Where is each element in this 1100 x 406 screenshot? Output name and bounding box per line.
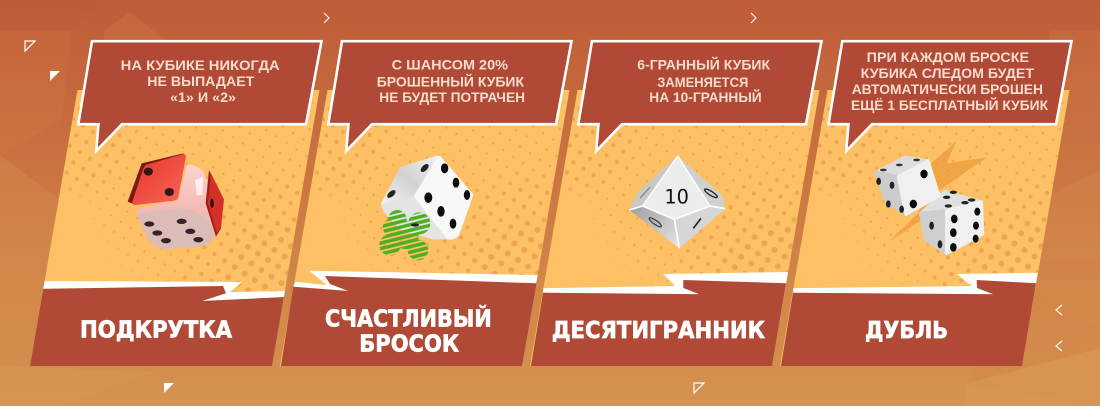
title 1: ПОДКРУТКА	[80, 318, 232, 344]
speech bubble 4: ПРИ КАЖДОМ БРОСКЕ	[867, 49, 1029, 65]
title 4: ДУБЛЬ	[865, 318, 948, 344]
speech bubble 2: БРОШЕННЫЙ КУБИК	[377, 72, 524, 90]
icon: red die	[128, 153, 224, 249]
bottom band 1	[20, 281, 290, 366]
speech bubble 1: «1» И «2»	[170, 89, 236, 105]
speech bubble 3: 6-ГРАННЫЙ КУБИК	[637, 56, 770, 72]
speech bubble 2: НЕ БУДЕТ ПОТРАЧЕН	[379, 89, 525, 105]
speech bubble 3	[578, 41, 822, 151]
title 2: БРОСОК	[359, 332, 459, 358]
speech bubble 1: НА КУБИКЕ НИКОГДА	[121, 57, 280, 73]
speech bubble 1: НЕ ВЫПАДАЕТ	[147, 73, 255, 89]
panel: Дубль	[750, 41, 1100, 370]
speech bubble 3: НА 10-ГРАННЫЙ	[649, 88, 762, 105]
speech bubble 4	[828, 41, 1072, 151]
icon: ten-sided die: 10	[664, 185, 689, 208]
title 3: ДЕСЯТИГРАННИК	[552, 318, 765, 344]
icon: two dice with lightning	[876, 142, 987, 253]
speech bubble 4: АВТОМАТИЧЕСКИ БРОШЕН	[852, 81, 1043, 97]
bottom band 2	[281, 271, 538, 366]
title 2: СЧАСТЛИВЫЙ	[325, 305, 492, 333]
panel: Счастливый бросок	[280, 40, 573, 366]
speech bubble 4: КУБИКА СЛЕДОМ БУДЕТ	[861, 65, 1034, 81]
title 2	[325, 305, 492, 358]
bottom band 4	[781, 273, 1038, 366]
speech bubble 1	[78, 41, 322, 151]
speech bubble 3: ЗАМЕНЯЕТСЯ	[657, 74, 748, 90]
speech bubble 2: С ШАНСОМ 20%	[392, 56, 509, 72]
speech bubble 4: ЕЩЁ 1 БЕСПЛАТНЫЙ КУБИК	[851, 96, 1048, 113]
icon: ten-sided die	[629, 156, 725, 248]
icon: white die with clover	[377, 158, 471, 262]
panel: Десятигранник	[500, 41, 900, 370]
speech bubble 2	[328, 41, 572, 151]
bottom band 3	[531, 272, 788, 366]
panel: Подкрутка	[30, 40, 323, 366]
